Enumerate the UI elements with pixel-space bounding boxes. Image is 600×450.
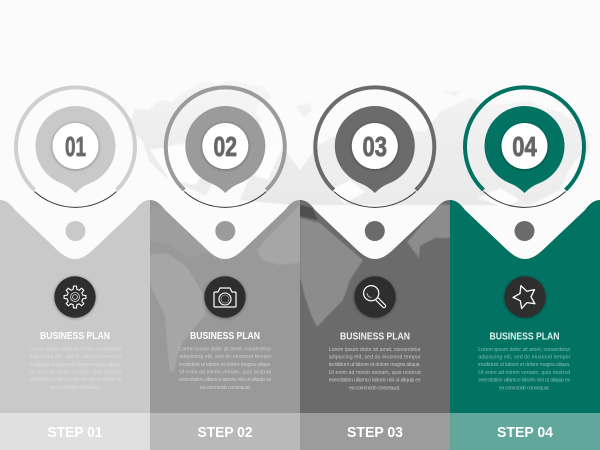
text block: step 3: Lorem ipsum dolor sit amet, consectetur [329, 347, 421, 353]
panel: step 1 body [0, 200, 150, 413]
marker 1: 01 [65, 131, 86, 162]
text block: step 3: BUSINESS PLAN [340, 330, 410, 342]
text block: step 3: exercitation ullamco laboris nisi ut aliquip ex [329, 378, 421, 384]
text block: step 4: adipiscing elit, sed do eiusmod tempor [478, 354, 571, 360]
step 2 bar: STEP 02 [198, 424, 252, 441]
text block: step 1: Lorem ipsum dolor sit amet, consectetur [30, 346, 122, 352]
step 4 bar [450, 413, 600, 450]
step 1 bar [0, 413, 150, 450]
text block: step 4: exercitation ullamco laboris nisi ut aliquip ex [478, 378, 571, 384]
text block: step 4: ea commodo consequat. [499, 385, 550, 391]
step 2 bar [150, 413, 300, 450]
icon: magnifier [354, 276, 396, 318]
text block: step 1: Ut enim ad minim veniam, quis nostrud [30, 370, 122, 376]
icon: camera [204, 276, 246, 318]
text block: step 2: adipiscing elit, sed do eiusmod tempor [179, 354, 272, 360]
text block: step 2: incididunt ut labore et dolore magna aliqua. [179, 362, 271, 368]
text block: step 3: ea commodo consequat. [349, 385, 400, 391]
marker 2: 02 [214, 131, 237, 162]
text block: step 4: BUSINESS PLAN [490, 330, 560, 342]
text block: step 3: Ut enim ad minim veniam, quis nostrud [329, 370, 421, 376]
text block: step 1: incididunt ut labore et dolore magna aliqua. [30, 362, 122, 368]
marker 3 [315, 86, 434, 241]
map highlights [150, 140, 520, 208]
panel: step 3 body [300, 200, 450, 413]
text block: step 3: adipiscing elit, sed do eiusmod tempor [329, 354, 421, 360]
text block: step 4: incididunt ut labore et dolore magna aliqua. [478, 362, 570, 368]
text block: step 1: BUSINESS PLAN [40, 330, 110, 342]
text block: step 4 [478, 330, 571, 391]
icon: star [504, 276, 546, 318]
panel: step 2 body [150, 200, 300, 413]
text block: step 1 [30, 330, 122, 391]
text block: step 2: exercitation ullamco laboris nisi ut aliquip ex [179, 377, 272, 383]
text block: step 3: incididunt ut labore et dolore magna aliqua. [329, 362, 421, 368]
world map [128, 80, 590, 205]
text block: step 2: Ut enim ad minim veniam, quis nostrud [179, 370, 271, 376]
step 3 bar [300, 413, 450, 450]
text block: step 2 [179, 330, 272, 391]
text block: step 2: Lorem ipsum dolor sit amet, consectetur [179, 346, 272, 352]
marker 2 [166, 86, 285, 241]
icon: gear [54, 276, 96, 318]
marker 1 [16, 86, 135, 241]
marker 3: 03 [363, 131, 387, 162]
step 1 bar: STEP 01 [48, 424, 102, 441]
step 3 bar: STEP 03 [347, 424, 403, 441]
text block: step 1: adipiscing elit, sed do eiusmod tempor [30, 354, 122, 360]
text block: step 3 [329, 330, 421, 391]
text block: step 1: ea commodo consequat. [50, 385, 101, 391]
text block: step 2: ea commodo consequat. [200, 385, 251, 391]
text block: step 4: Lorem ipsum dolor sit amet, consectetur [478, 347, 571, 353]
marker 4 [465, 86, 584, 241]
marker 4: 04 [512, 131, 537, 162]
text block: step 2: BUSINESS PLAN [190, 330, 260, 342]
step 4 bar: STEP 04 [497, 424, 554, 441]
text block: step 4: Ut enim ad minim veniam, quis nostrud [478, 370, 570, 376]
text block: step 1: exercitation ullamco laboris nisi ut aliquip ex [30, 377, 122, 383]
panel: step 4 body [450, 200, 600, 413]
